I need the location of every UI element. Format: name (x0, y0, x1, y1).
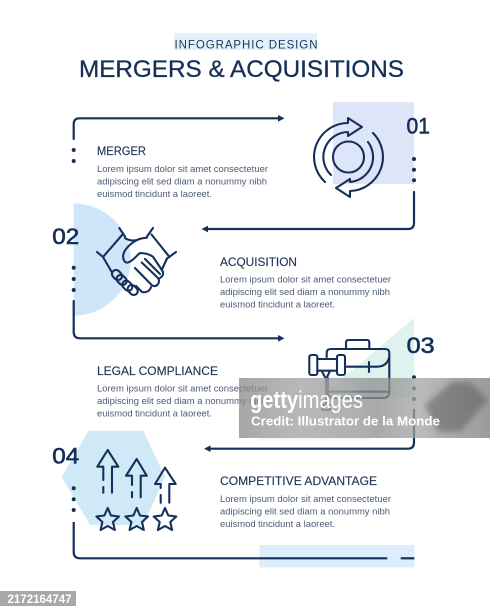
panel: acquisition connector and marker (52, 204, 284, 342)
title block: INFOGRAPHIC DESIGN (174, 39, 318, 51)
watermark banner: Credit: Illustrator de la Monde (251, 414, 440, 428)
panel: legal compliance connector and marker: 03 (407, 333, 435, 358)
icon: briefcase and gavel (309, 340, 389, 410)
text block: legal compliance: Lorem ipsum dolor sit amet consectetuer (97, 384, 269, 394)
text block: acquisition: Lorem ipsum dolor sit amet consectetuer (220, 274, 392, 285)
panel: merger connector and marker: 01 (406, 113, 430, 138)
text block: acquisition (220, 255, 392, 311)
text block: legal compliance (97, 364, 269, 420)
text block: legal compliance: LEGAL COMPLIANCE (97, 364, 218, 378)
icon: arrows and stars (96, 450, 176, 530)
text block: acquisition: ACQUISITION (220, 255, 297, 269)
title block (79, 33, 404, 83)
text block: acquisition: adipiscing elit sed diam a nonummy nibh (220, 287, 390, 298)
panel: merger connector and marker (72, 102, 430, 232)
image id tag: 2172164747 (8, 594, 72, 606)
text block: competitive advantage: euismod tincidunt a laoreet. (220, 519, 335, 530)
panel: competitive advantage connector and marker: 04 (52, 443, 79, 468)
panel: legal compliance connector and marker (204, 318, 435, 452)
text block: merger: MERGER (97, 144, 146, 158)
text block: merger: adipiscing elit sed diam a nonummy nibh (97, 176, 267, 188)
panel: acquisition connector and marker: 02 (52, 224, 79, 249)
text block: legal compliance: euismod tincidunt a laoreet. (97, 408, 212, 420)
watermark banner (239, 378, 490, 438)
panel: competitive advantage connector and marker (52, 431, 414, 568)
text block: merger: euismod tincidunt a laoreet. (97, 189, 212, 200)
text block: competitive advantage (220, 474, 392, 530)
title block: MERGERS & ACQUISITIONS (79, 56, 404, 83)
icon: handshake (97, 228, 176, 297)
image id tag (0, 591, 76, 606)
text block: acquisition: euismod tincidunt a laoreet. (220, 300, 335, 311)
watermark banner: gettyimages (250, 387, 363, 414)
text block: legal compliance: adipiscing elit sed diam a nonummy nibh (97, 396, 267, 407)
text block: competitive advantage: COMPETITIVE ADVANTAGE (220, 474, 377, 488)
icon: rotating arrows (314, 118, 383, 197)
text block: competitive advantage: adipiscing elit sed diam a nonummy nibh (220, 506, 390, 518)
text block: competitive advantage: Lorem ipsum dolor sit amet consectetuer (220, 494, 392, 505)
text block: merger: Lorem ipsum dolor sit amet consectetuer (97, 164, 269, 175)
text block: merger (97, 144, 269, 200)
